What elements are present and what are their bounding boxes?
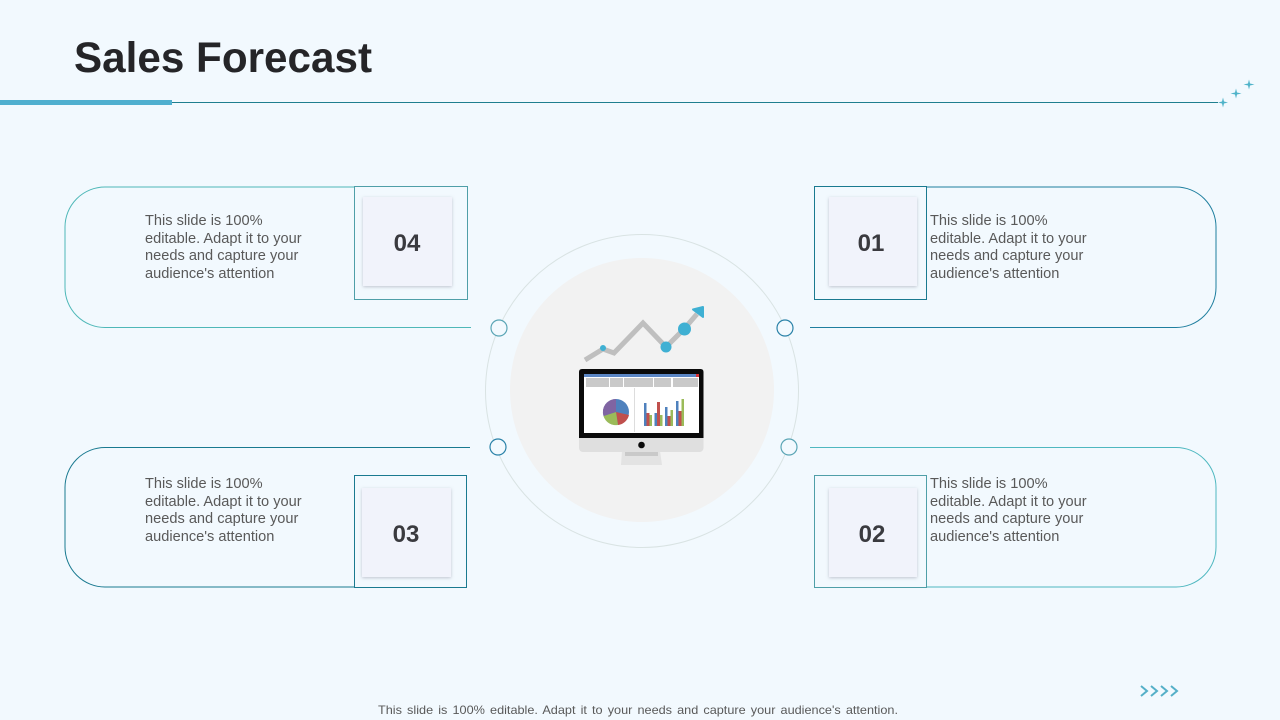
text 03: editable. Adapt it to your <box>145 494 302 510</box>
number card 03: 03 <box>393 521 419 548</box>
header rule <box>0 100 1218 105</box>
text 02: This slide is 100% <box>930 476 1048 492</box>
text 02: audience's attention <box>930 529 1059 545</box>
text 04: editable. Adapt it to your <box>145 231 302 247</box>
panel: 01 <box>810 186 1216 328</box>
panel: 04 <box>65 186 471 328</box>
panel: 03 <box>65 448 470 588</box>
icon: computer monitor with charts <box>579 369 704 465</box>
text 02: editable. Adapt it to your <box>930 494 1087 510</box>
frame 01 <box>814 186 926 300</box>
number card 04: 04 <box>394 230 421 257</box>
number card 04 <box>363 197 452 286</box>
text 04: needs and capture your <box>145 248 298 264</box>
icon: sparkles <box>1218 80 1254 108</box>
central circle <box>486 234 798 548</box>
pie chart <box>603 399 629 425</box>
text 04: audience's attention <box>145 266 274 282</box>
text 03: This slide is 100% <box>145 476 263 492</box>
connector dots <box>490 320 797 455</box>
title: Sales Forecast <box>74 34 372 82</box>
text 01: This slide is 100% <box>930 213 1048 229</box>
icon: chevrons <box>1141 686 1177 696</box>
text 01: audience's attention <box>930 266 1059 282</box>
icon: rising trend line <box>585 307 703 360</box>
bar chart <box>644 399 684 426</box>
number card 02: 02 <box>859 521 885 548</box>
frame 04 <box>354 186 468 300</box>
frame 03 <box>354 476 466 588</box>
text 04: This slide is 100% <box>145 213 263 229</box>
frame 02 <box>814 476 926 588</box>
number card 03 <box>362 488 451 577</box>
text 01: editable. Adapt it to your <box>930 231 1087 247</box>
panel: 02 <box>810 448 1216 588</box>
text 01: needs and capture your <box>930 248 1083 264</box>
text 03: needs and capture your <box>145 511 298 527</box>
number card 01: 01 <box>858 230 884 257</box>
number card 02 <box>829 488 917 577</box>
text 02: needs and capture your <box>930 511 1083 527</box>
number card 01 <box>829 197 917 286</box>
text 03: audience's attention <box>145 529 274 545</box>
footer text: This slide is 100% editable. Adapt it to your needs and capture your audience's attention. <box>378 703 898 717</box>
